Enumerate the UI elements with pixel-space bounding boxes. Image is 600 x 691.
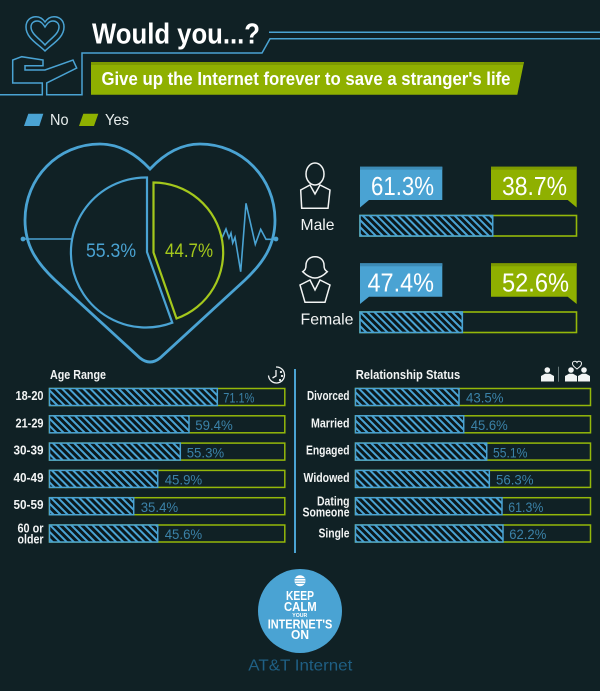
panel: female xyxy=(300,257,577,332)
row: 50-59 xyxy=(14,498,285,515)
heading: Age Range xyxy=(50,367,106,382)
heading: Relationship Status xyxy=(356,367,460,382)
row: 30-39: 55.3% xyxy=(187,444,224,460)
pie value: yes: 44.7% xyxy=(165,241,213,262)
row: 30-39 xyxy=(14,443,285,460)
badge: keep calm: ON xyxy=(291,628,309,642)
badge: keep calm: INTERNET'S xyxy=(268,617,332,631)
row: widowed: 56.3% xyxy=(496,472,534,488)
callout: yes: 38.7% xyxy=(502,173,567,201)
row: engaged: Engaged xyxy=(306,444,350,458)
legend xyxy=(24,112,129,129)
pie value: no: 55.3% xyxy=(86,241,136,262)
badge: keep calm: CALM xyxy=(284,600,317,614)
icon: male xyxy=(301,163,330,208)
brand label: AT&T Internet xyxy=(248,657,353,674)
pie slice: yes xyxy=(154,182,223,318)
row: 50-59: 35.4% xyxy=(141,499,178,515)
callout: no xyxy=(360,263,442,304)
icon: heart in hand xyxy=(0,17,600,95)
row: dating someone: Someone xyxy=(302,506,350,520)
row: engaged: 55.1% xyxy=(493,444,528,460)
row: married: Married xyxy=(311,416,350,430)
icon: female xyxy=(300,257,330,302)
legend: No xyxy=(50,112,69,129)
row: engaged xyxy=(306,443,590,460)
row: dating someone: Dating xyxy=(317,495,350,509)
badge: keep calm: YOUR xyxy=(292,613,308,619)
bar xyxy=(360,216,576,236)
row: 18-20: 71.1% xyxy=(223,390,254,406)
heartbeat line xyxy=(21,203,278,272)
row: 40-49 xyxy=(14,470,285,488)
row: widowed: Widowed xyxy=(304,471,350,485)
callout: no xyxy=(360,167,442,208)
heart pie chart xyxy=(21,144,278,362)
callout: yes xyxy=(491,167,577,208)
label: Male xyxy=(300,217,335,234)
row: 40-49: 45.9% xyxy=(165,472,202,488)
row: 21-29: 59.4% xyxy=(195,417,233,433)
panel: age range xyxy=(14,367,285,546)
row: married: 45.6% xyxy=(471,417,508,433)
row: 21-29: 21-29 xyxy=(16,416,44,430)
banner: Give up the Internet forever to save a stranger's life xyxy=(102,69,510,89)
callout: yes: 52.6% xyxy=(502,270,569,298)
icon: single and couple xyxy=(541,361,590,382)
callout: no: 47.4% xyxy=(368,270,434,298)
row: 50-59: 50-59 xyxy=(14,498,44,512)
row: single xyxy=(318,525,590,542)
heart outline xyxy=(25,144,275,362)
header xyxy=(0,17,600,95)
callout: no: 61.3% xyxy=(371,173,434,201)
badge: keep calm xyxy=(258,569,342,653)
row: 60 or older: older xyxy=(18,532,44,546)
row: 18-20 xyxy=(16,388,285,406)
row: divorced: Divorced xyxy=(307,389,350,403)
icon: clock xyxy=(268,367,284,383)
bar xyxy=(360,312,576,332)
title: Would you...? xyxy=(92,18,260,50)
badge: keep calm: KEEP xyxy=(286,589,314,603)
row: married xyxy=(311,416,590,433)
row: divorced xyxy=(307,388,590,406)
row: divorced: 43.5% xyxy=(466,390,504,406)
icon: AT&T globe xyxy=(294,575,306,586)
row: single: 62.2% xyxy=(509,526,546,542)
row: 60 or older: 45.6% xyxy=(165,526,202,542)
label: Female xyxy=(300,312,354,329)
pie slice: no xyxy=(71,177,172,327)
row: 60 or older xyxy=(18,522,285,546)
row: dating someone: 61.3% xyxy=(508,499,543,515)
panel: male xyxy=(300,163,577,236)
row: 30-39: 30-39 xyxy=(14,444,44,458)
row: dating someone xyxy=(302,495,590,520)
legend: Yes xyxy=(105,112,129,129)
row: widowed xyxy=(304,470,590,488)
row: single: Single xyxy=(318,526,350,540)
panel: relationship status xyxy=(302,361,590,542)
row: 21-29 xyxy=(16,416,285,433)
row: 60 or older: 60 or xyxy=(18,522,44,536)
row: 40-49: 40-49 xyxy=(14,471,44,485)
callout: yes xyxy=(491,263,577,304)
row: 18-20: 18-20 xyxy=(16,389,44,403)
banner xyxy=(91,62,524,95)
